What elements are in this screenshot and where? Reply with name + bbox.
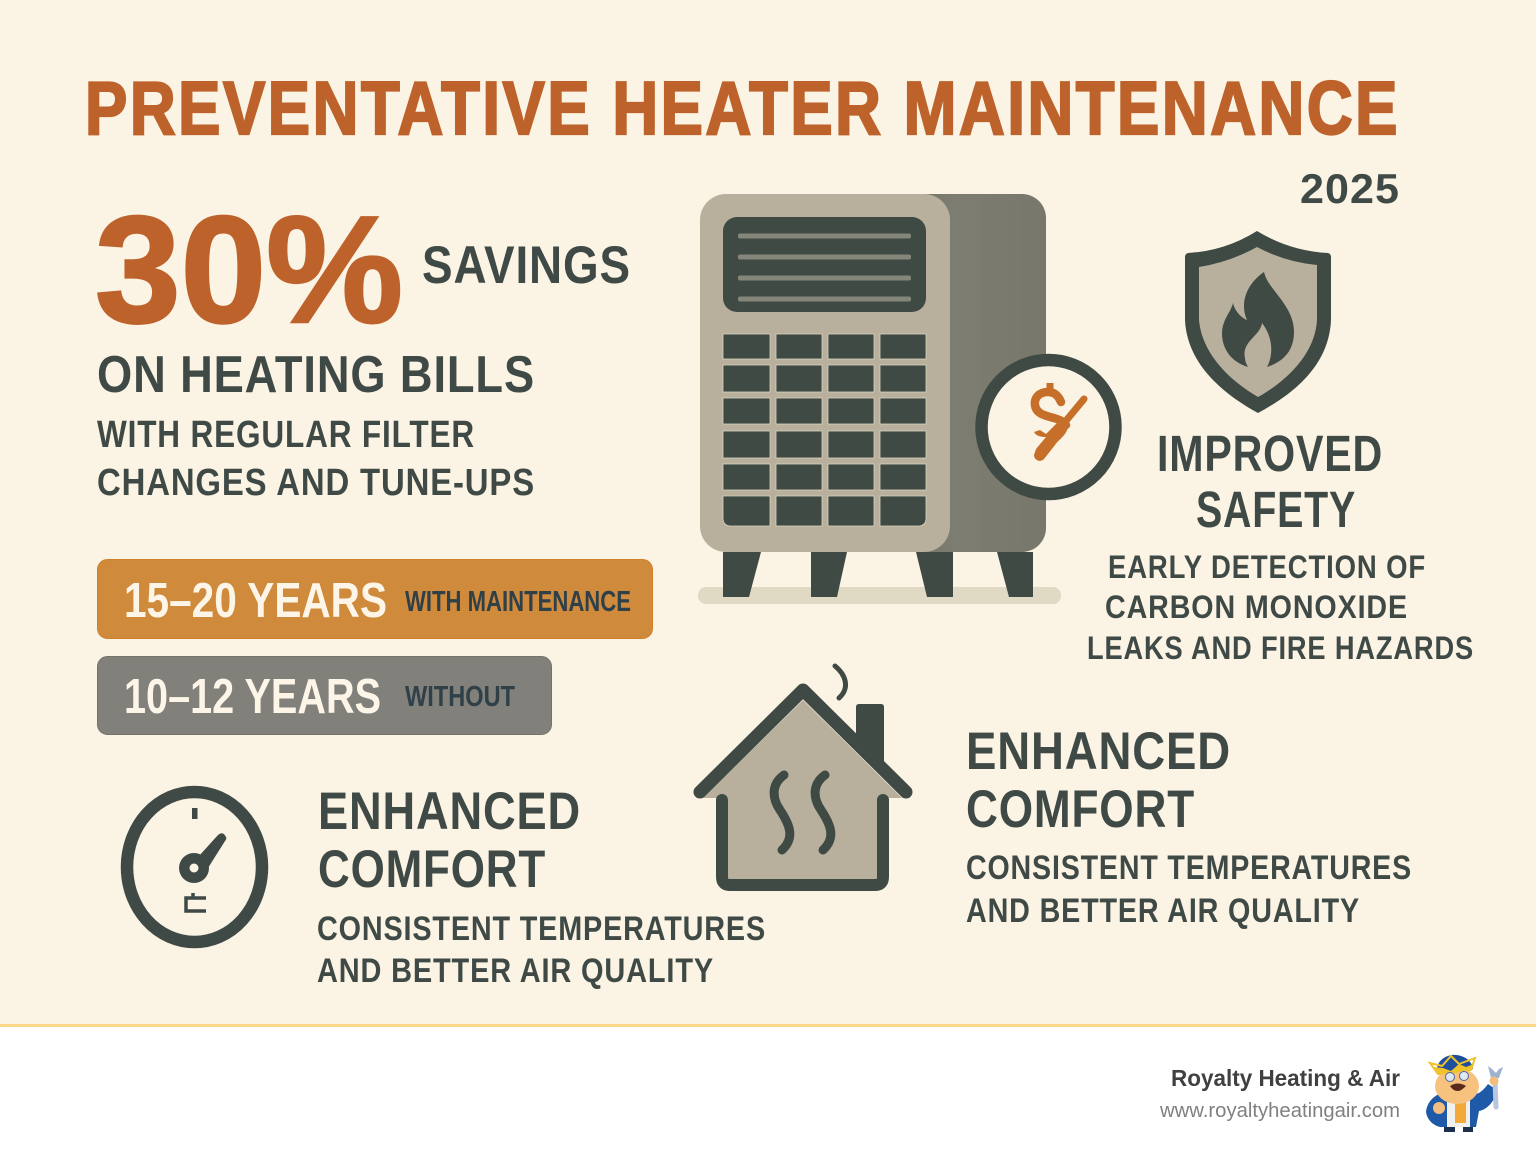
safety description: LEAKS AND FIRE HAZARDS	[1087, 630, 1474, 666]
safety heading	[1157, 425, 1383, 538]
icon: crossed-out dollar badge	[982, 360, 1116, 494]
comfort description right: CONSISTENT TEMPERATURES	[966, 849, 1412, 887]
panel: enhanced comfort left	[317, 782, 766, 990]
comfort heading right	[966, 722, 1231, 839]
safety heading: SAFETY	[1196, 481, 1356, 538]
panel: improved safety	[1087, 425, 1474, 666]
panel: enhanced comfort right	[966, 722, 1412, 930]
footer brand name: Royalty Heating & Air	[1171, 1065, 1400, 1091]
savings description: CHANGES AND TUNE-UPS	[97, 462, 535, 504]
comfort heading left	[318, 782, 581, 899]
lifespan bar: without maintenance: 10–12 YEARS	[124, 670, 381, 724]
safety description	[1087, 549, 1474, 666]
lifespan bar: with maintenance: WITH MAINTENANCE	[405, 586, 631, 618]
comfort description left: CONSISTENT TEMPERATURES	[317, 910, 766, 948]
savings description	[97, 414, 535, 504]
comfort description right: AND BETTER AIR QUALITY	[966, 892, 1360, 930]
year: 2025	[1300, 165, 1400, 212]
icon: mascot logo	[1426, 1055, 1503, 1132]
savings percentage: 30%	[95, 185, 403, 355]
icon: heater unit	[698, 194, 1061, 604]
lifespan bar: without maintenance: WITHOUT	[405, 681, 515, 713]
savings description: WITH REGULAR FILTER	[97, 414, 475, 456]
panel: savings	[95, 185, 631, 504]
savings heading: ON HEATING BILLS	[97, 346, 535, 404]
comfort heading left: COMFORT	[318, 840, 546, 899]
savings label: SAVINGS	[422, 236, 631, 295]
comfort heading right: COMFORT	[966, 780, 1195, 839]
comfort heading right: ENHANCED	[966, 722, 1231, 781]
comfort heading left: ENHANCED	[318, 782, 581, 841]
safety description: EARLY DETECTION OF	[1108, 549, 1426, 585]
icon: gauge	[127, 792, 262, 942]
comfort description left	[317, 910, 766, 990]
comfort description right	[966, 849, 1412, 930]
footer website: www.royaltyheatingair.com	[1159, 1100, 1400, 1122]
lifespan bar: with maintenance: 15–20 YEARS	[124, 574, 387, 628]
safety heading: IMPROVED	[1157, 425, 1383, 482]
comfort description left: AND BETTER AIR QUALITY	[317, 952, 714, 990]
icon: safety shield with flame	[1185, 231, 1331, 413]
lifespan bar: with maintenance	[98, 560, 652, 638]
safety description: CARBON MONOXIDE	[1105, 589, 1408, 625]
icon: house with heat	[700, 666, 906, 885]
lifespan bar: without maintenance	[98, 656, 552, 734]
